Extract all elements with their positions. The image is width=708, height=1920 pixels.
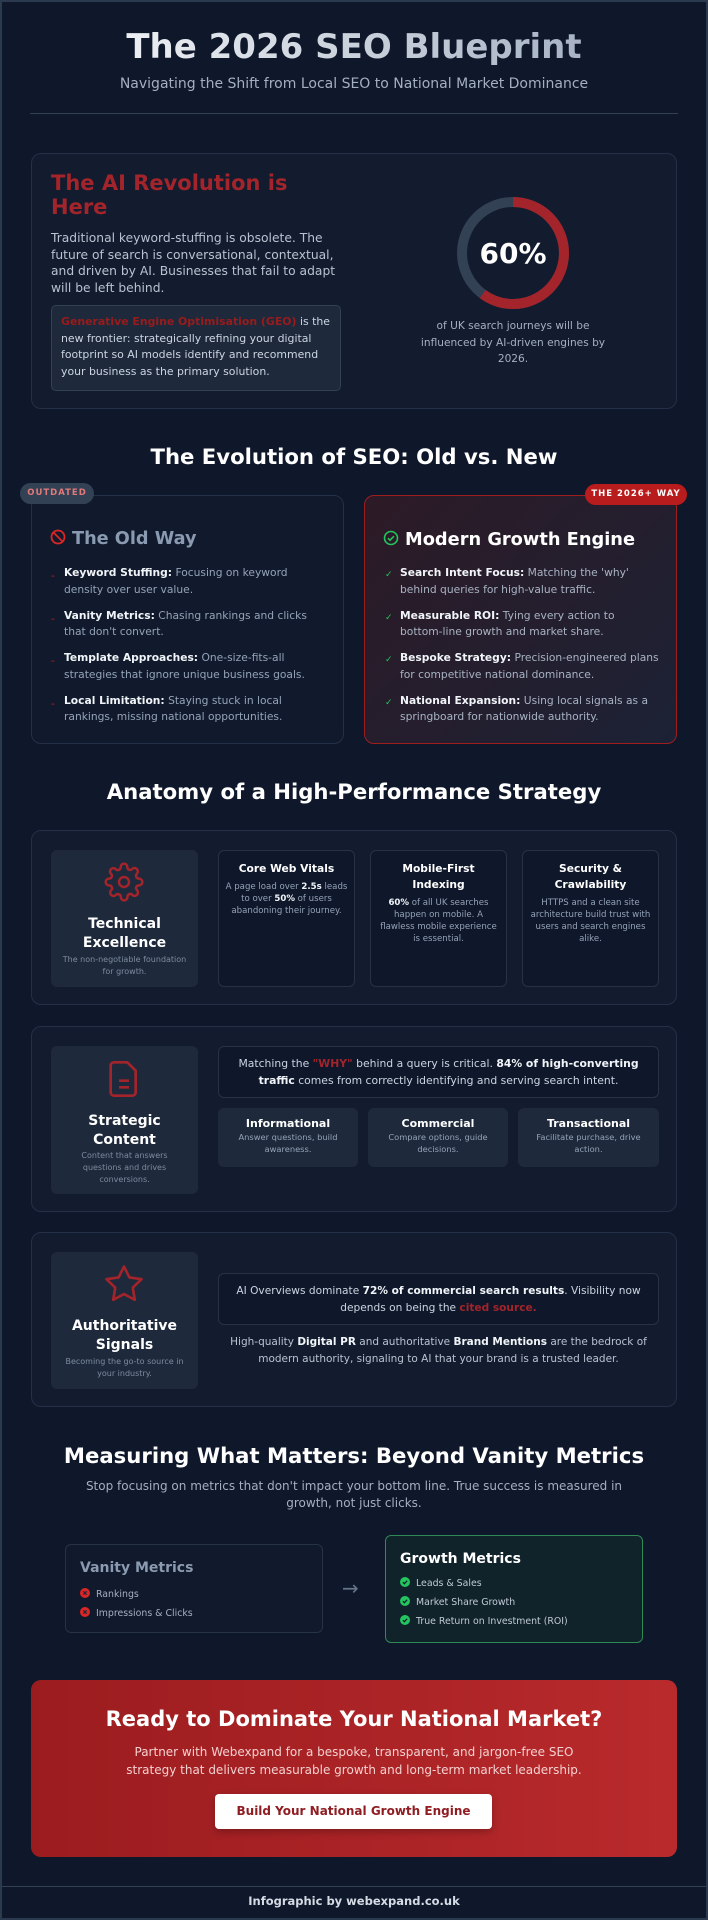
footer: Infographic by webexpand.co.uk xyxy=(248,1894,460,1908)
list: old way: Template Approaches: One-size-fits-all strategies that ignore unique business goals. xyxy=(64,651,305,680)
callout: GEO: Generative Engine Optimisation (GEO) is the new frontier: strategically refining your digital footprint so AI models identify and recommend your business as the primary solution. xyxy=(61,315,330,378)
card: commercial: Commercial xyxy=(402,1117,474,1130)
panel: old way: - xyxy=(51,654,55,667)
panel: call to action xyxy=(31,1680,677,1857)
heading: old way: The Old Way xyxy=(72,529,197,549)
panel: technical excellence xyxy=(31,830,677,1005)
title: The 2026 SEO Blueprint xyxy=(126,27,582,67)
callout: GEO xyxy=(51,305,341,391)
card: transactional xyxy=(518,1108,659,1167)
card: informational: Answer questions, build awareness. xyxy=(238,1132,338,1154)
card: commercial: Compare options, guide decisions. xyxy=(388,1132,488,1154)
chart: 60% donut: 60% xyxy=(479,237,547,270)
tile: strategic content xyxy=(51,1046,198,1194)
subtitle: Navigating the Shift from Local SEO to National Market Dominance xyxy=(120,76,588,92)
text: CTA: Partner with Webexpand for a bespoke, transparent, and jargon-free SEO strategy that delivers measurable growth and long-term market leadership. xyxy=(126,1745,582,1777)
tile: authoritative: Becoming the go-to source in your industry. xyxy=(65,1357,184,1378)
card: mobile-first: Mobile-First Indexing xyxy=(402,862,475,891)
panel: strategic content xyxy=(31,1026,677,1212)
text: digital PR: High-quality Digital PR and authoritative Brand Mentions are the bedrock of modern authority, signaling to AI that your brand is a trusted leader. xyxy=(230,1336,647,1364)
list: growth: Leads & Sales xyxy=(416,1578,482,1589)
panel: old way: - xyxy=(51,569,55,582)
card: core web vitals xyxy=(218,850,355,987)
text: AI intro: Traditional keyword-stuffing is obsolete. The future of search is conversational, contextual, and driven by AI. Businesses that fail to adapt will be left behind. xyxy=(51,231,335,295)
heading: AI revolution: The AI Revolution is Here xyxy=(51,171,288,219)
heading: CTA: Ready to Dominate Your National Market? xyxy=(106,1707,602,1731)
list: vanity xyxy=(80,1588,193,1619)
panel: growth metrics xyxy=(385,1535,643,1643)
tile: technical: The non-negotiable foundation for growth. xyxy=(63,955,186,976)
text: donut caption: of UK search journeys will be influenced by AI-driven engines by 2026. xyxy=(421,320,605,365)
title xyxy=(0,24,708,70)
list: modern: Measurable ROI: Tying every action to xyxy=(400,608,615,622)
chart: 60% donut xyxy=(457,197,569,309)
heading: anatomy: Anatomy of a High-Performance Strategy xyxy=(107,779,601,804)
list: modern: Bespoke Strategy: Precision-engineered plans for competitive national dominance. xyxy=(400,651,659,680)
panel: vanity metrics xyxy=(65,1544,323,1633)
panel: vanity metrics: Vanity Metrics xyxy=(80,1560,193,1576)
card: transactional: Transactional xyxy=(547,1117,630,1130)
card: informational xyxy=(218,1108,358,1167)
panel: modern way: ✓ xyxy=(385,612,393,622)
panel: old way xyxy=(31,495,344,744)
list: growth xyxy=(400,1577,568,1627)
card: mobile-first: 60% of all UK searches happen on mobile. A flawless mobile experience is essential. xyxy=(380,898,497,944)
badge: outdated xyxy=(20,483,94,504)
list: modern: National Expansion: Using local signals as a springboard for nationwide authority. xyxy=(400,694,648,723)
tile: strategic content: Content that answers questions and drives conversions. xyxy=(81,1151,168,1184)
list: vanity: Impressions & Clicks xyxy=(96,1608,193,1619)
callout: AI overviews xyxy=(218,1273,659,1325)
list: modern: Search Intent Focus: Matching the 'why' behind queries for high-value traffic. xyxy=(400,566,629,596)
text: measuring intro: Stop focusing on metrics that don't impact your bottom line. True success is measured in growth, not just clicks. xyxy=(86,1479,622,1510)
icon: document xyxy=(109,1061,137,1097)
list: old way: Local Limitation: Staying stuck in local rankings, missing national opportunities. xyxy=(64,694,282,723)
panel: modern way xyxy=(364,495,677,744)
card: security: HTTPS and a clean site architecture build trust with users and search engines alike. xyxy=(531,898,650,944)
list: old way xyxy=(51,566,307,723)
card: security xyxy=(522,850,659,987)
button xyxy=(215,1794,492,1829)
card: mobile-first xyxy=(370,850,507,987)
list: old way: Keyword Stuffing: Focusing on keyword density over user value. xyxy=(64,566,288,596)
list: growth: Market Share Growth xyxy=(416,1597,515,1608)
panel: AI revolution xyxy=(31,153,677,409)
tile: authoritative xyxy=(51,1252,198,1389)
badge: outdated: OUTDATED xyxy=(27,488,87,498)
tile: strategic content: Content xyxy=(93,1132,156,1148)
badge: 2026+ way xyxy=(585,484,687,505)
panel: modern way: ✓ xyxy=(385,655,393,665)
tile: technical xyxy=(51,850,198,987)
icon: gear xyxy=(104,862,144,902)
list: modern xyxy=(385,566,659,723)
callout: search intent xyxy=(218,1046,659,1098)
list: vanity: Rankings xyxy=(96,1589,139,1600)
card: transactional: Facilitate purchase, drive action. xyxy=(536,1132,641,1154)
tile: authoritative: Authoritative Signals xyxy=(72,1318,177,1353)
arrow: → xyxy=(342,1576,359,1600)
card: commercial xyxy=(368,1108,508,1167)
card: core web vitals: Core Web Vitals xyxy=(239,862,334,875)
heading: modern: Modern Growth Engine xyxy=(405,529,635,550)
heading: measuring: Measuring What Matters: Beyond Vanity Metrics xyxy=(64,1443,644,1468)
card: informational: Informational xyxy=(246,1117,330,1130)
tile: strategic content: Strategic xyxy=(88,1113,161,1129)
panel: old way: - xyxy=(51,696,55,710)
button: Build Your National Growth Engine xyxy=(236,1804,470,1818)
badge: 2026+ way: THE 2026+ WAY xyxy=(591,489,681,499)
panel: old way: - xyxy=(51,612,55,624)
card: security: Security & Crawlability xyxy=(555,862,626,891)
panel: authoritative signals xyxy=(31,1232,677,1407)
icon: star xyxy=(105,1265,143,1302)
callout: search intent: Matching the "WHY" behind a query is critical. 84% of high-converting traffic comes from correctly identifying and serving search intent. xyxy=(238,1057,639,1086)
callout: AI overviews: AI Overviews dominate 72% of commercial search results. Visibility now depends on being the cited source. xyxy=(236,1285,641,1314)
heading: evolution: The Evolution of SEO: Old vs. New xyxy=(151,444,557,469)
panel: modern way: ✓ xyxy=(385,698,393,708)
list: growth: True Return on Investment (ROI) xyxy=(416,1616,568,1627)
tile: technical: Technical Excellence xyxy=(83,916,166,951)
panel: growth metrics: Growth Metrics xyxy=(400,1551,521,1567)
list: modern: bottom-line growth and market share. xyxy=(400,625,604,638)
card: core web vitals: A page load over 2.5s leads to over 50% of users abandoning their journey. xyxy=(226,882,347,916)
panel: modern way: ✓ xyxy=(385,570,393,580)
list: old way: Vanity Metrics: Chasing rankings and clicks that don't convert. xyxy=(64,608,307,638)
